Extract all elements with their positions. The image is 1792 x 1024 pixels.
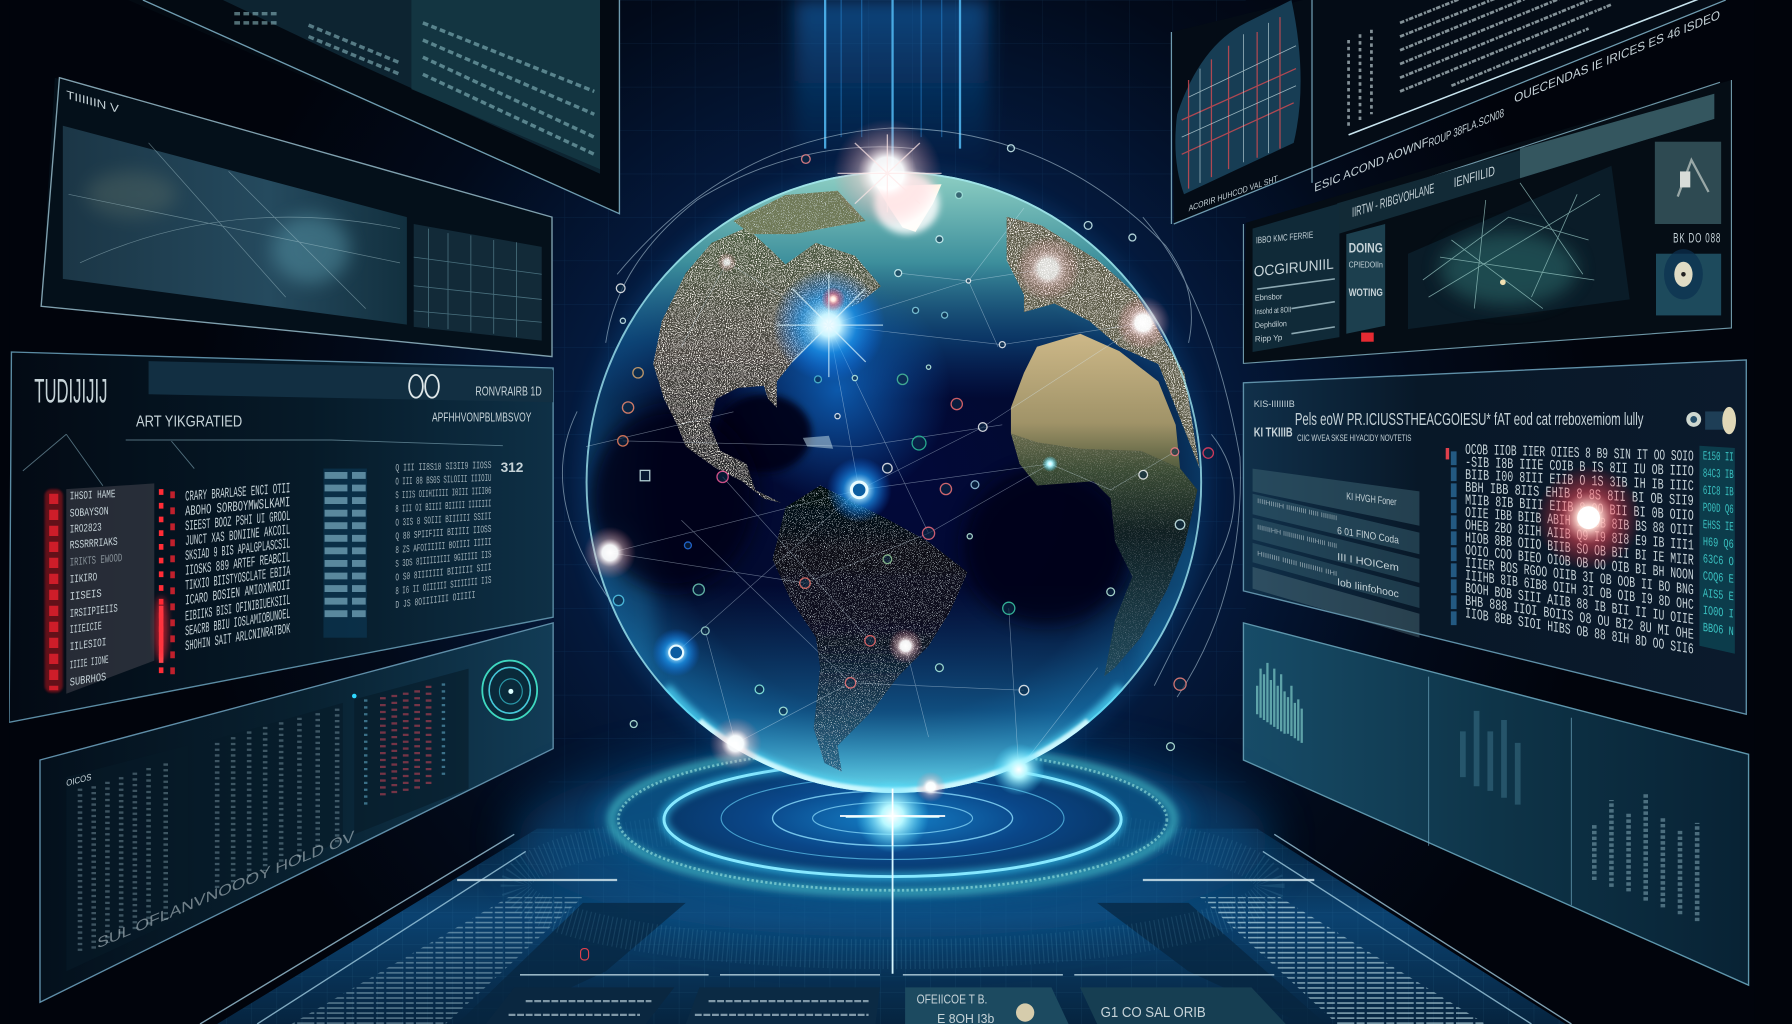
map with red grid: ACORIR HUHCOD VAL SHT	[1189, 173, 1278, 213]
panel: left lower monitor: OICOS	[66, 772, 91, 788]
table column: names: IIKIRO	[70, 571, 97, 587]
floor text right	[1200, 897, 1486, 1024]
status tags: DOING	[1349, 241, 1383, 256]
network links	[586, 208, 1175, 770]
table column: names: IIIIE IIONE	[70, 654, 109, 673]
red flare	[1536, 465, 1641, 570]
teal codes: PO0D Q6	[1703, 501, 1734, 517]
table column: values: 8 ZS AFOIIIIII BOIIII IIIII	[395, 537, 491, 557]
panel: left central table monitor: SKSIAD 9 BIS APALGPLASCSIL	[185, 536, 290, 565]
data nodes	[613, 145, 1213, 750]
panel: right lower monitor	[1243, 623, 1749, 985]
table column: values: D JS 8OIIIIIII OIIIII	[395, 590, 475, 612]
left list rows: IIIIIIIHH IIIIIIIIIII IIIIHIII IIIII	[1257, 524, 1337, 550]
status tags: CPIEDOIIn	[1349, 260, 1383, 269]
left sub-panel: IBBO KMC FERRIE	[1256, 230, 1313, 245]
thumbnails	[1655, 142, 1721, 315]
data columns	[80, 709, 337, 954]
panel: left central table monitor: EIBIIKS BISI OFINIBIUEKSIIL	[185, 593, 290, 626]
continent: Europe and Asia	[1007, 217, 1200, 468]
teal codes: BBO6 N	[1703, 620, 1734, 639]
table column: values: Q 88 SPIIFIII BIIIII IIOSS	[395, 524, 491, 543]
bar chart middle	[1463, 711, 1518, 805]
table column: names: IISEIS	[70, 587, 102, 604]
African night lights	[1011, 434, 1197, 676]
table column: names: RSSRRRIAKS	[70, 536, 118, 553]
header icons	[1686, 407, 1736, 434]
teal codes: 63C6 O	[1703, 552, 1734, 569]
panel: left central table monitor: SHOHIN SAIT ARLCNINRATBOK	[185, 621, 290, 655]
teal codes: AIS5 E	[1703, 587, 1734, 604]
teal column backing	[1699, 446, 1735, 654]
table column: records: CRARY BRARLASE ENCI OTII	[185, 481, 290, 506]
panel: left central table monitor: TUDIJIJIJ	[34, 372, 107, 410]
continent: North America	[653, 228, 881, 503]
slanted label: SUL OFLANVNOOOY HOLD OV	[97, 828, 355, 952]
panel: right central table monitor	[1243, 360, 1746, 714]
left list rows: 6 01 FINO Coda	[1337, 526, 1399, 547]
sphere body	[588, 172, 1200, 793]
teal codes	[1703, 449, 1734, 639]
heading labels: APFHHVONPBLMBSVOY	[432, 411, 532, 425]
floor	[200, 743, 1571, 1024]
table column: values: S IIIS OIIHIIIII I0III IIII06	[395, 485, 491, 502]
map with red grid	[1175, 0, 1301, 213]
floor wedge darks	[457, 903, 686, 1024]
heading labels: ART YIKGRATIED	[136, 413, 242, 430]
base centre flare	[840, 779, 945, 853]
header strip: IIRTW - RIBGVOHLANE	[1352, 180, 1434, 220]
panel: top-left monitor	[128, 0, 619, 214]
slanted captions: ROUP 38FLA.SCN08	[1429, 106, 1504, 150]
header strip	[1337, 94, 1714, 234]
table column: names: IRSIIPIEIIS	[70, 602, 118, 621]
teal codes: H69 Q6	[1703, 535, 1734, 552]
panel: left central table monitor	[9, 352, 553, 722]
continent: Caribbean	[803, 436, 833, 449]
left sub-panel: Ebnsbor	[1255, 292, 1283, 303]
bar chart left	[1257, 663, 1302, 743]
north pole flare	[833, 119, 942, 234]
status tags	[1346, 224, 1385, 342]
header band	[149, 361, 553, 402]
slanted captions: OUECENDAS IE IRICES ES 46 ISDEO	[1514, 7, 1720, 106]
network image	[1408, 166, 1630, 329]
left sub-panel: Ripp Yp	[1255, 333, 1283, 344]
table column: records: IIOSKS 889 ARTEF REABCIL	[185, 550, 290, 580]
panel: left central table monitor: SIEEST BOOZ PSHI UI GROOL	[185, 509, 290, 535]
bottom floor tiles: OFEIICOE T B.	[917, 992, 987, 1006]
left sub-panel	[1253, 203, 1339, 352]
table column: values: 312	[501, 460, 524, 475]
table column: values: S 3DS 8IIIIIIIII 9GIIIII IIS	[395, 549, 491, 571]
table column: values	[395, 460, 524, 612]
log text block	[1349, 0, 1646, 126]
continent: South America	[772, 486, 968, 772]
panel: top-right monitors	[1171, 0, 1726, 224]
teal codes: 84C3 IB	[1703, 467, 1734, 482]
left list rows: IIIIHIIIIH IIIIIIIIII IIIII IIIIIIII	[1257, 498, 1337, 522]
data table	[1465, 443, 1694, 659]
floor text left	[291, 897, 583, 1024]
header strip: IENFIILID	[1454, 162, 1495, 190]
teal codes: COQ6 E	[1703, 569, 1734, 587]
slanted captions: ESIC ACOND AOWNF	[1314, 134, 1429, 195]
table column: records: JUNCT XAS BONIINE AKCOIL	[185, 523, 290, 550]
thumbnails: BK DO 088	[1673, 230, 1721, 245]
teal codes: EHSS IE	[1703, 518, 1734, 534]
table column: values: 8 I6 II OIIIIII SIIIIIII IIS	[395, 575, 491, 598]
heading labels: RONVRAIRB 1D	[475, 384, 542, 398]
red status column	[45, 489, 173, 693]
table column: values: O III 88 BS0S SILOIII IIIOIU	[395, 473, 491, 489]
table column: records: ABOHO SORBOYMWSLKAMI	[185, 495, 290, 520]
panel: left lower monitor	[40, 623, 553, 1002]
rim glow	[586, 172, 1201, 793]
data table: BBH IBB 8IIS EHIB 8 8S 8II BI OB SII9	[1465, 480, 1694, 510]
continent: Greenland	[877, 184, 942, 232]
panel: right central table monitor: KIS-IIIIIIIB	[1254, 399, 1295, 409]
globe	[560, 119, 1236, 802]
status tags: WOTING	[1349, 287, 1383, 299]
panel: left central table monitor: SEACRB BBIU IOSLAMIOBUNOEL	[185, 607, 290, 640]
teal codes: IO0O I	[1703, 603, 1734, 622]
left list rows: HIIIIIIII IIIIIII IIIIIIIIIII IIHI	[1257, 551, 1337, 578]
left sub-panel: Dephdilon	[1255, 319, 1287, 330]
left list rows: KI HVGH Foner	[1346, 491, 1397, 508]
table column: records	[185, 481, 290, 655]
table column: blue codes	[323, 469, 367, 638]
left list rows	[1253, 469, 1419, 638]
table column: names: IRO2823	[70, 521, 102, 537]
table column: names: IHSOI HAME	[70, 488, 116, 503]
panel: left central table monitor: TIKXIO BIISTYOSCLATE EBIIA	[185, 564, 290, 595]
top light beam	[794, 0, 989, 171]
table column: names: IILESIOI	[70, 636, 106, 654]
ambient halo	[577, 166, 1210, 799]
side data grid	[414, 224, 542, 341]
panel: left upper map monitor	[41, 78, 552, 357]
bar chart right	[1594, 794, 1697, 921]
bottom floor tiles	[486, 975, 1286, 1024]
header text: TIIIIIIN V	[66, 88, 119, 116]
left sub-panel: Insohd at 8OII	[1255, 305, 1291, 316]
table column: values: O S0 8IIIIIII BIIIIII SIII	[395, 562, 491, 585]
glow hubs	[584, 119, 1170, 802]
slanted captions	[1314, 7, 1720, 195]
left list rows: III I HOICem	[1337, 552, 1399, 574]
radar	[481, 659, 538, 721]
table column: names: SUBRHOS	[70, 671, 106, 690]
teal codes: E150 II	[1703, 449, 1734, 465]
left list rows: Iob Iiinfohooc	[1337, 577, 1399, 600]
holographic base rings	[515, 739, 1270, 974]
continent: Africa	[1011, 334, 1197, 676]
continent: Arctic islands	[733, 191, 866, 234]
table column: records: ICARO BOSIEN AMIOXNROII	[185, 578, 290, 610]
table column: names: IRIKTS EWOOD	[70, 552, 122, 570]
table column: values: O 3IS 8 SOIII BIIIIII SSIII	[395, 511, 491, 530]
table column: values: 8 III OI BIIII BIIIII IIIIIII	[395, 498, 491, 516]
table column: values: Q III II8S10 SI3II9 IIOSS	[395, 460, 491, 475]
panel: right central table monitor: KI TKIIIB	[1254, 426, 1293, 440]
table column: names: SOBAYSON	[70, 505, 109, 521]
teal codes: 6IC8 IB	[1703, 484, 1734, 500]
bottom floor tiles: G1 CO SAL ORIB	[1101, 1005, 1206, 1021]
map image	[63, 126, 407, 325]
panel: right central table monitor: CIIC WVEA SKSE HIYACIDY NOVTETIS	[1297, 433, 1411, 443]
orbit lines around globe	[562, 128, 1240, 697]
table column: names	[66, 483, 154, 694]
panel: right upper monitor	[1243, 80, 1731, 363]
heading labels	[136, 375, 542, 430]
left sub-panel: OCGIRUNIIL	[1254, 257, 1334, 281]
table column: names: IIIEICIE	[70, 620, 102, 637]
